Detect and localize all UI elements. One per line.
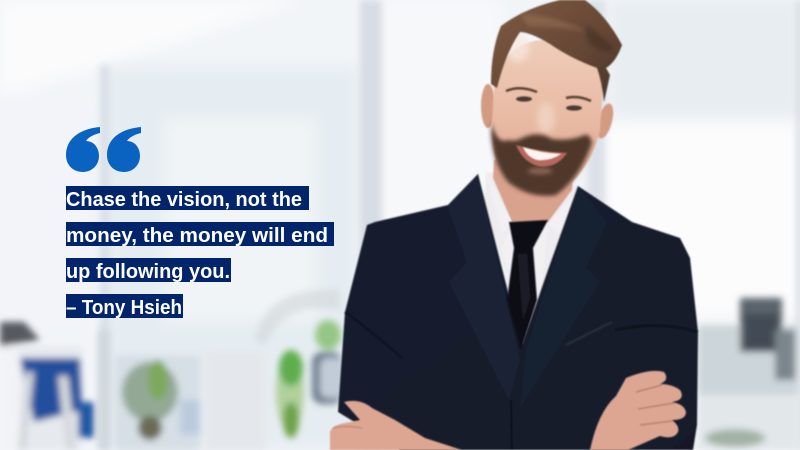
right hand bbox=[590, 371, 686, 450]
quote line 2: money, the money will end bbox=[66, 225, 328, 247]
quote text block bbox=[66, 186, 334, 319]
icon: quotation marks bbox=[66, 127, 141, 172]
necktie bbox=[507, 220, 548, 350]
office furniture, bottom left bbox=[0, 290, 344, 450]
suit jacket bbox=[338, 174, 698, 450]
person bbox=[330, 0, 698, 450]
neck and shirt bbox=[484, 160, 578, 296]
office furniture, bottom right bbox=[698, 298, 798, 450]
hair bbox=[491, 0, 622, 102]
beard bbox=[491, 122, 592, 196]
face bbox=[492, 34, 603, 197]
quote line 3: up following you. bbox=[66, 261, 230, 283]
quote line 1: Chase the vision, not the bbox=[66, 189, 302, 211]
eyes and brows bbox=[506, 88, 591, 111]
attribution: – Tony Hsieh bbox=[66, 297, 182, 319]
ears bbox=[481, 84, 616, 140]
hands and arms bbox=[330, 371, 686, 450]
left hand bbox=[330, 401, 462, 450]
mouth bbox=[516, 145, 567, 166]
